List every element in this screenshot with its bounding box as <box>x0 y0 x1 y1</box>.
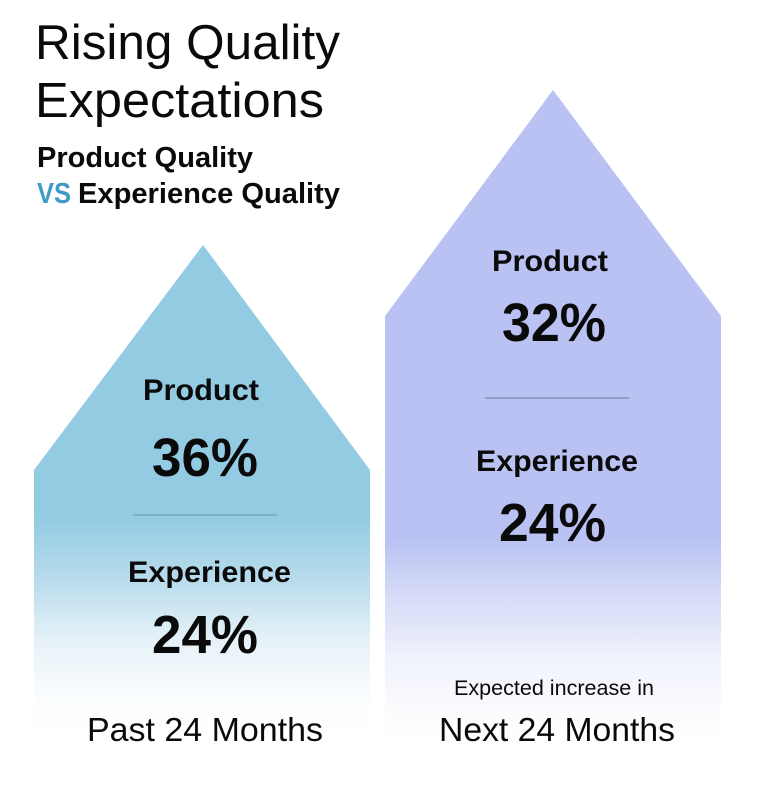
label: experience next: Experience <box>476 445 638 478</box>
subtitle: VS <box>37 178 71 210</box>
note: expected increase: Expected increase in <box>454 677 654 700</box>
title: Expectations <box>35 74 324 128</box>
house shape: past <box>34 245 370 740</box>
value: experience next: 24% <box>499 493 606 553</box>
subtitle: Product Quality <box>37 142 253 174</box>
label: product past: Product <box>143 374 259 407</box>
subtitle <box>37 142 340 210</box>
caption: next 24 months: Next 24 Months <box>439 711 675 748</box>
subtitle: Experience Quality <box>78 178 340 210</box>
panel: next 24 months house <box>385 90 721 748</box>
title: Rising Quality <box>35 16 341 70</box>
house shape: next <box>385 90 721 740</box>
value: experience past: 24% <box>152 605 258 665</box>
panel: past 24 months house <box>34 245 370 748</box>
label: experience past: Experience <box>128 556 291 589</box>
value: product past: 36% <box>152 428 258 488</box>
value: product next: 32% <box>502 293 606 353</box>
label: product next: Product <box>492 245 608 278</box>
caption: past 24 months: Past 24 Months <box>87 711 323 748</box>
title <box>35 16 341 128</box>
